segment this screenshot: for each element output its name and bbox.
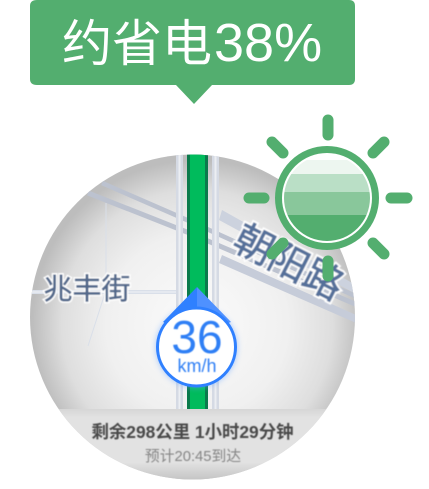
callout text: 约省电38%	[62, 13, 322, 73]
sun outer ring	[278, 150, 376, 246]
callout bubble	[30, 0, 355, 104]
label halo: 兆丰街	[43, 273, 131, 306]
map background	[30, 154, 356, 480]
arrival time text: 预计20:45到达	[145, 448, 241, 465]
label halo: 朝阳路	[226, 218, 350, 309]
marker arrow	[163, 287, 231, 335]
label text: 朝阳路	[226, 218, 350, 309]
speed unit: km/h	[177, 356, 217, 376]
street label: 朝阳路	[231, 220, 347, 305]
street label: 兆丰街	[43, 273, 131, 306]
panel: circular map	[30, 154, 356, 480]
remaining distance text: 剩余298公里 1小时29分钟	[92, 422, 294, 442]
diagonal road strips	[88, 183, 355, 304]
speed value: 36	[171, 311, 223, 363]
label text: 兆丰街	[43, 273, 131, 306]
bubble shape	[30, 0, 355, 104]
diagonal road upper right band	[219, 210, 356, 294]
bottom info bar	[59, 409, 326, 480]
diagonal road lower right band	[219, 255, 356, 323]
marker circle	[158, 308, 236, 386]
sun level stripes	[284, 160, 370, 241]
icon: sun	[249, 120, 407, 276]
vertical side roads	[176, 154, 219, 410]
marker glow	[156, 306, 238, 388]
sun rays	[249, 120, 407, 276]
green route	[187, 154, 208, 410]
speed marker	[156, 287, 238, 388]
minor streets	[30, 203, 176, 346]
